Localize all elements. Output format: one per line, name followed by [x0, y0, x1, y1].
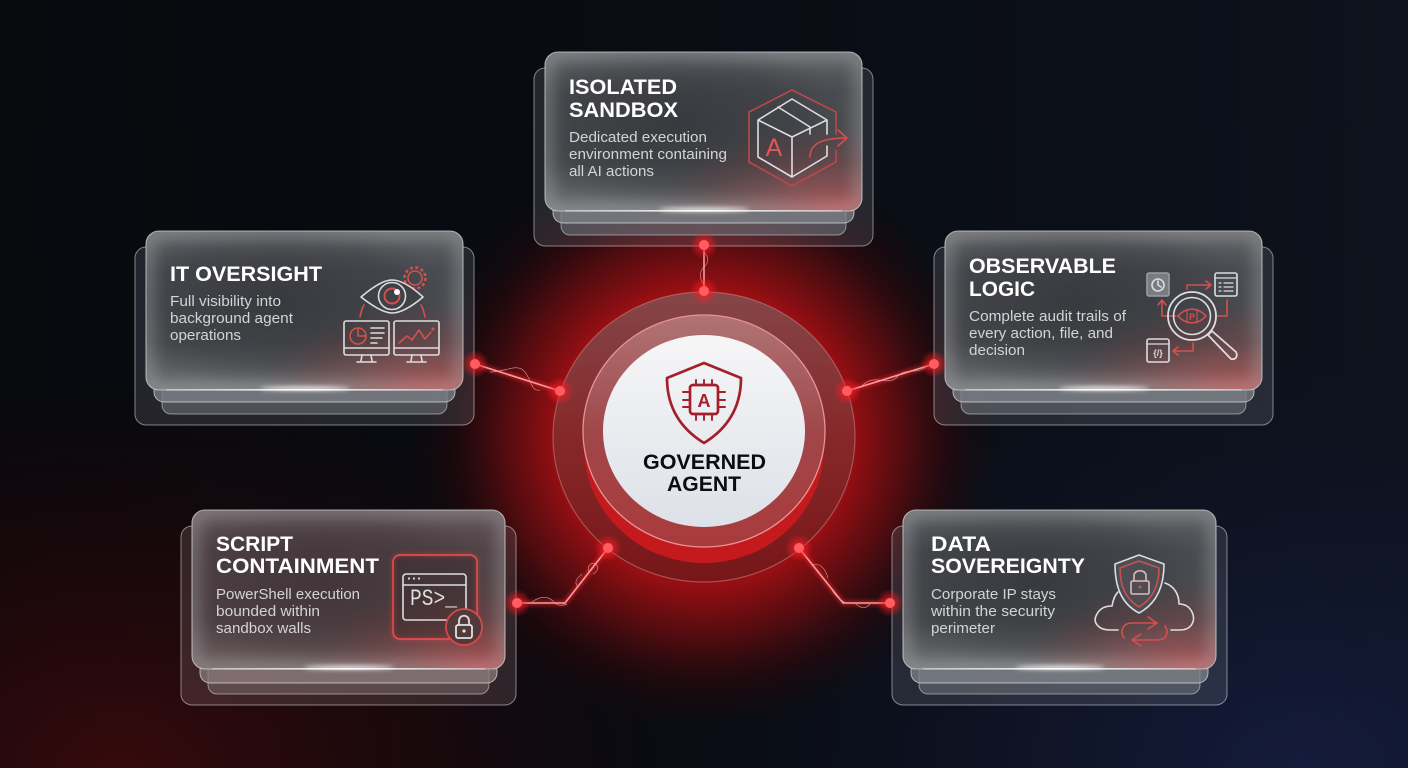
icon: eye and monitors — [344, 268, 439, 362]
heading: SANDBOX — [569, 99, 678, 122]
icon: cube in hexagon: A — [766, 134, 783, 162]
glass card — [192, 510, 505, 670]
description: environment containing — [569, 147, 727, 163]
connector: center to script containment — [503, 534, 622, 617]
description: all AI actions — [569, 164, 654, 180]
icon: shield with chip — [667, 363, 741, 443]
heading — [931, 533, 1085, 578]
panel: IT oversight — [135, 231, 474, 425]
connector: center to data sovereignty — [785, 534, 904, 617]
hub white disc — [603, 335, 805, 527]
hub label — [643, 451, 766, 496]
icon: cube in hexagon — [749, 90, 847, 186]
description: decision — [969, 343, 1025, 359]
description — [569, 130, 727, 180]
heading — [569, 76, 678, 122]
heading: OBSERVABLE — [969, 255, 1116, 278]
heading: CONTAINMENT — [216, 555, 379, 578]
hub middle ring — [583, 315, 825, 547]
heading: DATA — [931, 533, 991, 556]
connector: center to observable logic — [833, 350, 948, 405]
glass card — [545, 52, 862, 212]
glass card — [903, 510, 1216, 670]
description: within the security — [930, 604, 1056, 620]
description — [170, 294, 293, 344]
heading: IT OVERSIGHT — [170, 263, 322, 286]
description: bounded within — [216, 604, 320, 620]
description: Dedicated execution — [569, 130, 707, 146]
description: operations — [170, 328, 241, 344]
central hub: governed agent — [553, 292, 855, 582]
glass card — [146, 231, 463, 391]
description — [930, 587, 1056, 637]
heading: SOVEREIGNTY — [931, 555, 1085, 578]
hub red base — [584, 331, 824, 563]
description: Full visibility into — [170, 294, 281, 310]
icon: shield with chip: A — [698, 391, 710, 411]
panel: data sovereignty — [892, 510, 1227, 705]
glass card — [945, 231, 1262, 391]
icon: powershell terminal with lock — [393, 555, 482, 645]
hub label: GOVERNED — [643, 451, 766, 474]
panel: observable logic — [934, 231, 1273, 425]
connector: center to isolated sandbox — [690, 231, 718, 305]
description: background agent — [170, 311, 293, 327]
hub outer ring — [553, 292, 855, 582]
icon: magnifier audit trail — [1147, 273, 1237, 362]
icon: shield, cloud and sync — [1095, 555, 1194, 646]
description: every action, file, and — [969, 326, 1113, 342]
icon: magnifier audit trail: P — [1189, 312, 1195, 322]
hub label: AGENT — [667, 473, 741, 496]
description — [216, 587, 360, 637]
connector: center to IT oversight — [461, 350, 574, 405]
description — [969, 309, 1127, 359]
heading: LOGIC — [969, 278, 1035, 301]
panel: isolated sandbox — [534, 52, 873, 246]
icon: powershell terminal with lock: PS>_ — [410, 586, 457, 612]
description: Complete audit trails of — [969, 309, 1127, 325]
panel: script containment — [181, 510, 516, 705]
description: sandbox walls — [216, 621, 311, 637]
description: perimeter — [931, 621, 995, 637]
description: Corporate IP stays — [931, 587, 1056, 603]
icon: magnifier audit trail: {/} — [1153, 348, 1163, 358]
heading: SCRIPT — [216, 533, 293, 556]
heading: ISOLATED — [569, 76, 677, 99]
heading — [969, 255, 1116, 301]
description: PowerShell execution — [216, 587, 360, 603]
heading — [216, 533, 379, 578]
